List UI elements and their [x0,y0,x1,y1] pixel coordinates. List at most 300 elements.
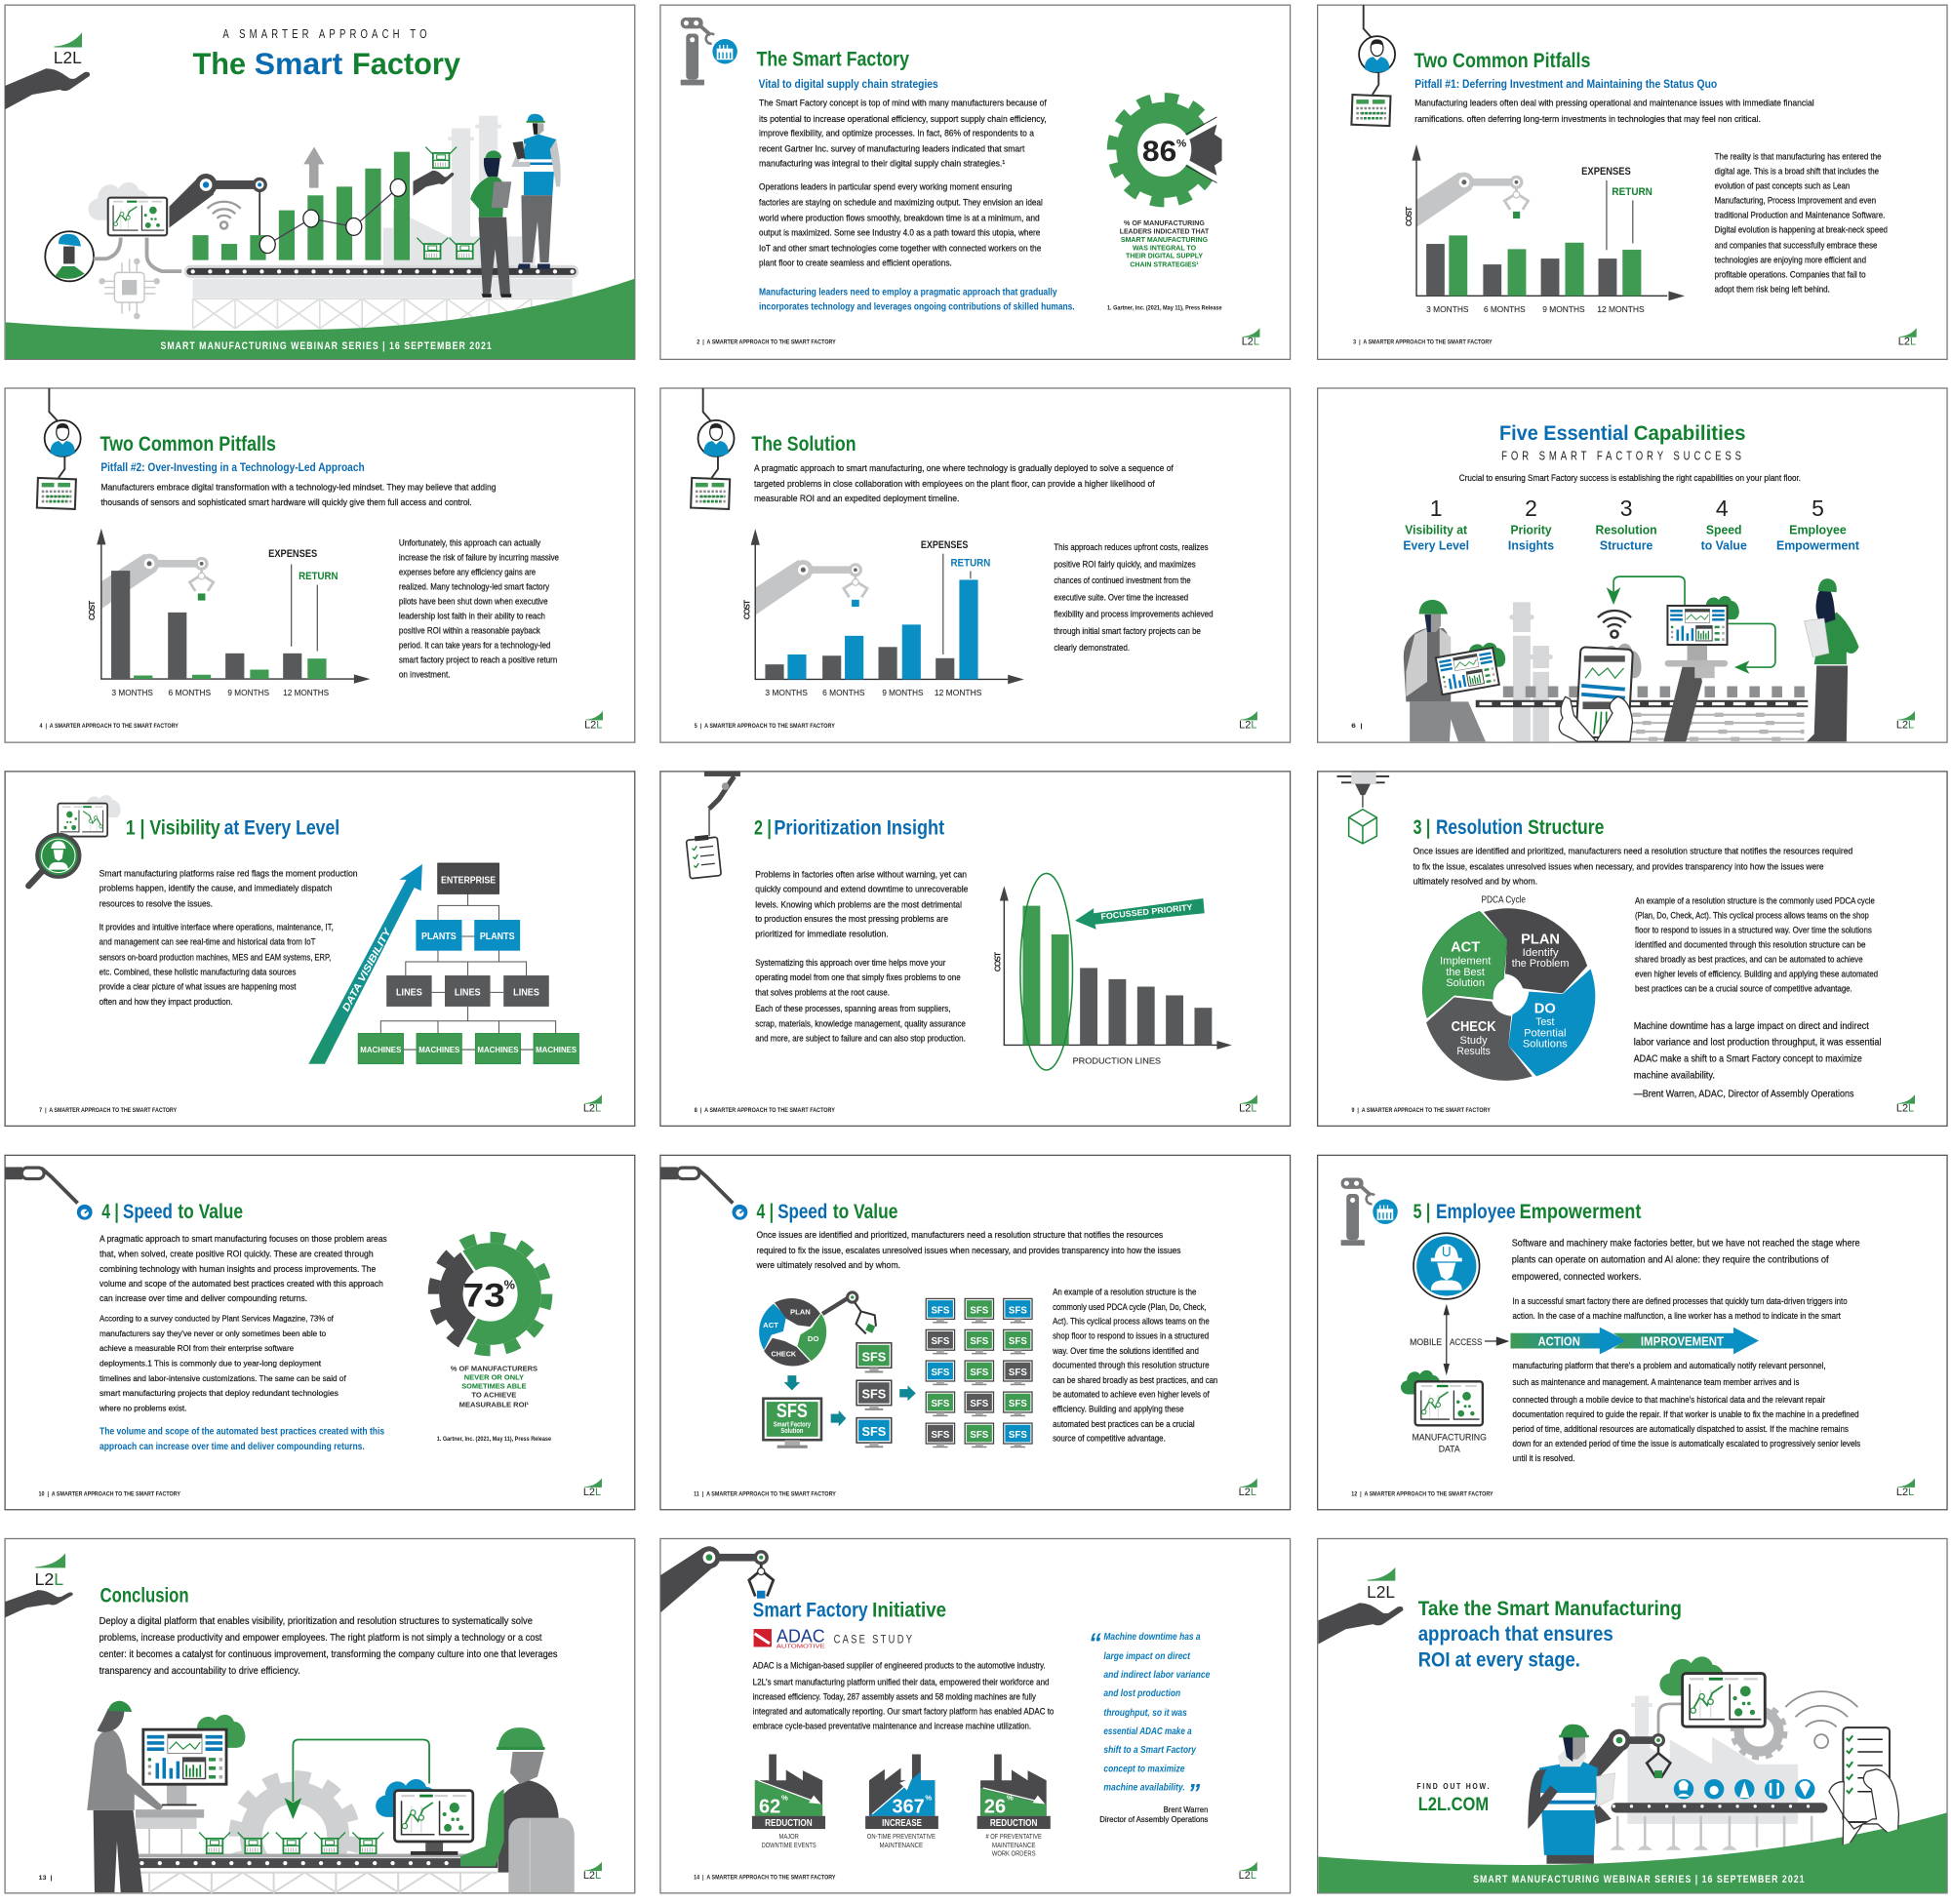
chart: cost vs return: 6 MONTHS [822,688,865,697]
body text: measurable ROI and an expedited deployment timeline. [754,493,959,503]
arrow: green side loop [1729,623,1775,674]
gear stat 86 percent: % [1176,139,1186,150]
logo: L2L [1367,1582,1395,1602]
arrow: right [831,1410,846,1426]
blue callout text [759,288,1075,313]
logo: L2L [1239,719,1256,731]
capability 3: Resolution [1596,522,1657,536]
trend line [259,178,406,254]
heading: to Value [833,1201,897,1223]
gear caption: SOMETIMES ABLE [461,1382,527,1391]
chart: cost vs return: 12 MONTHS [283,688,329,697]
panel: slide 11 speed to value [660,1155,1291,1510]
call to action: L2L.COM [1418,1794,1489,1815]
stat: 367 percent increase: 367 [893,1796,925,1817]
chart: pareto: COST [993,951,1003,972]
segment: do: DO [1534,1001,1556,1016]
side text: evolution of past concepts such as Lean [1715,179,1850,190]
arrow: action improvement: IMPROVEMENT [1641,1333,1724,1348]
body text: required to fix the issue, escalates unresolved issues when necessary, and provides transparency into how the issues [757,1245,1181,1255]
monitors: SFS grid: SFS [970,1305,989,1316]
PDCA wheel small: DO [808,1334,818,1343]
logo: L2L [1896,1103,1914,1115]
body text: quickly compound and extend downtime to unrecoverable [755,884,968,894]
icon: robot arm [1575,1729,1670,1787]
body text 2: where no problems exist. [99,1403,186,1412]
heading: ROI at every stage. [1418,1648,1580,1671]
icon: printer and cube [1337,772,1389,844]
PDCA wheel small: CHECK [772,1350,797,1359]
heading [1413,1201,1641,1223]
body text: etc. Combined, these holistic manufacturing data sources [100,967,297,977]
side text: be automated to achieve even higher levels of [1053,1389,1210,1400]
chart: cost vs return: RETURN [299,571,338,582]
conveyor belt [184,265,578,278]
body text middle: In a successful smart factory there are defined processes that quickly turn data-driven triggers into [1513,1295,1848,1306]
stat caption: MAJOR [778,1834,799,1841]
panel: slide 7 visibility [5,772,635,1126]
logo: L2L [1242,337,1259,348]
conveyor belt [1612,1803,1827,1812]
heading: approach that ensures [1418,1623,1613,1646]
footer: 3 | A SMARTER APPROACH TO THE SMART FACTORY [1353,339,1493,346]
arrow: green top loop [1607,576,1685,605]
side text: Digital evolution is happening at break-neck speed [1715,223,1888,234]
stat caption [762,1834,816,1849]
logo: L2L [1896,1487,1914,1498]
body text [753,1660,1054,1730]
body text bottom: connected through a mobile device to that machine's historical data and the relevant repair [1513,1394,1825,1405]
level: plants [416,920,520,951]
footer: 10 | A SMARTER APPROACH TO THE SMART FACTORY [39,1490,180,1497]
chart: cost vs return: COST [87,600,97,620]
chart: cost vs return [741,529,1024,697]
segment: act: Implement [1440,955,1491,967]
quote text: Machine downtime has a large impact on direct and indirect [1634,1021,1869,1032]
panel: slide 13 conclusion [5,1538,635,1895]
panel: slide 3 pitfall 1 [1318,5,1947,359]
side text: realized. Many technology-led smart factory [399,581,549,592]
body text top [1512,1239,1860,1283]
gear caption: MEASURABLE ROI¹ [459,1401,530,1409]
heading [1418,1598,1682,1671]
heading: Employee [1436,1201,1516,1223]
heading: Resolution [1436,816,1523,839]
body text 2: smart manufacturing projects that deploy redundant technologies [100,1388,338,1398]
side text: clearly demonstrated. [1054,642,1130,653]
logo: L2L [583,1870,601,1882]
capability 5: Employee [1789,522,1847,536]
heading: Smart Factory [753,1599,868,1621]
body text 2: timelines and labor-intensive customizations. The same can be said of [100,1373,346,1383]
side text: positive ROI within a reasonable payback [399,624,540,635]
level: machines: MACHINES [360,1045,402,1054]
monitor: SFS large: Solution [780,1428,803,1435]
PDCA wheel small [759,1298,826,1366]
logo: L2L [584,719,602,731]
panel: slide 8 prioritization [660,772,1291,1126]
icon: grey cloud [1596,644,1642,678]
icon: robot arm and clipboard [686,772,740,879]
stat: 26 percent reduction: REDUCTION [990,1818,1037,1829]
capability 5 [1776,496,1860,552]
body text 2: According to a survey conducted by Plant Services Magazine, 73% of [100,1314,334,1324]
quote text: machine availability. [1634,1071,1715,1082]
body text: IoT and other smart technologies come together with connected workers on the [759,242,1041,253]
heading: Speed [123,1201,173,1223]
body text bottom: documentation required to guide the repair. If that worker is unable to fix the machine in a predefined [1513,1408,1859,1419]
chart: cost vs return: 9 MONTHS [1542,304,1585,314]
chart: cost vs return: 12 MONTHS [935,688,982,697]
panel: slide 15 closing [1318,1538,1947,1893]
monitors: SFS grid: SFS [931,1430,950,1441]
capability 4: Speed [1706,522,1742,536]
body text: manufacturing was integral to their digital supply chain strategies.¹ [759,158,1005,169]
person: woman at workstation [87,1701,204,1892]
monitor: SFS large [763,1399,821,1448]
title: Smart [255,46,343,81]
footer: 13 | [39,1875,53,1882]
subheading: Pitfall #2: Over-Investing in a Technology-Led Approach [100,460,365,474]
icon: robot arm [660,1546,774,1612]
body text: center: it becomes a catalyst for continuous improvement, transforming the company culture into one that leverages [100,1649,557,1660]
footer: 7 | A SMARTER APPROACH TO THE SMART FACTORY [39,1107,178,1114]
body text: problems, increase productivity and empower employees. The right platform is not simply a technology or a cost [100,1633,542,1644]
segment: check: Results [1456,1046,1491,1057]
level: enterprise: ENTERPRISE [441,876,496,887]
chart: cost vs return: 6 MONTHS [169,688,212,697]
monitors: SFS grid: SFS [970,1336,989,1347]
heading: Speed [777,1201,827,1223]
body text bottom: down for an extended period of time the issue is automatically escalated to progressively senior levels [1513,1438,1860,1448]
illustration: factory chain [1630,715,1804,739]
capability 5: Empowerment [1776,537,1860,552]
person: woman with clipboard [1804,578,1859,741]
icon: dashboard monitor [143,1729,226,1805]
body text: Operations leaders in particular spend every working moment ensuring [759,181,1012,192]
stat caption: MAINTENANCE [880,1843,924,1849]
body text: its potential to increase operational efficiency, support supply chain efficiency, [759,113,1047,124]
heading: Prioritization Insight [774,816,944,839]
monitors: SFS medium [856,1343,892,1448]
mobile access label: MOBILE [1410,1337,1442,1347]
side text: Unfortunately, this approach can actually [399,536,540,547]
quote text [1634,1021,1882,1100]
side text: Act). This cyclical process allows teams on the [1053,1316,1210,1327]
side text: automated best practices can be a crucial [1053,1418,1195,1429]
logo: L2L [583,1103,601,1115]
capability 4: to Value [1701,537,1747,552]
heading: to Value [178,1201,243,1223]
person: man with tablet [1404,600,1505,741]
logo: ADAC: AUTOMOTIVE [776,1645,825,1650]
wave foreground [1779,1812,1947,1866]
icon: dashboard monitor [108,198,167,235]
side text: This approach reduces upfront costs, realizes [1054,541,1209,552]
body text 2: manufacturers say they've never or only sometimes been able to [100,1329,326,1338]
body text: operating model from one that simply fixes problems to one [755,972,961,982]
icon: employee circle [1413,1233,1480,1299]
monitors: SFS grid: SFS [931,1368,950,1378]
heading: Five Essential [1499,420,1629,445]
body text bottom: until it is resolved. [1513,1452,1575,1463]
body text 2: deployments.1 This is commonly due to year-long deployment [100,1359,322,1368]
heading: 1 | Visibility [126,817,220,840]
monitors: SFS grid [926,1298,1032,1448]
icon: arm and gauge [660,1167,747,1220]
call to action: FIND OUT HOW. [1416,1781,1489,1791]
stat caption: ON-TIME PREVENTATIVE [867,1834,936,1841]
arrow: data visibility: DATA VISIBILITY [340,926,394,1013]
monitors: SFS grid: SFS [970,1399,989,1409]
icon: wifi [1598,611,1631,638]
side text: flexibility and process improvements achieved [1054,609,1214,619]
body text: Smart manufacturing platforms raise red flags the moment production [100,868,358,879]
arrow: mobile access vertical [1444,1304,1450,1375]
subheading: FOR SMART FACTORY SUCCESS [1501,451,1741,463]
process icons [1674,1779,1814,1799]
body text: levels. Knowing which problems are the most detrimental [755,899,962,910]
monitors: SFS grid: SFS [1009,1430,1027,1441]
pull quote: and indirect labor variance [1103,1670,1211,1681]
body text [100,482,497,507]
illustration: conveyor [135,1854,498,1868]
gear caption: SMART MANUFACTURING [1121,235,1208,244]
icon: hanging worker and tablet [691,388,735,509]
pull quote: essential ADAC make a [1103,1726,1192,1737]
pull quote: and lost production [1103,1688,1180,1699]
side text: expenses before any efficiency gains are [399,566,536,576]
logo [583,1478,602,1498]
segment: do: Test [1535,1016,1554,1028]
panel: slide 14 case study [660,1538,1291,1893]
body text bottom: such as maintenance and management. A maintenance team member arrives and is [1513,1376,1800,1387]
heading: Initiative [872,1599,946,1621]
side text: chances of continued investment from the [1054,575,1191,585]
level: lines: LINES [513,987,539,998]
chart: cost vs return: EXPENSES [921,539,969,551]
logo [1896,1094,1915,1115]
side text [1715,150,1888,294]
chart: cost vs return: COST [741,599,751,619]
attribution [1099,1805,1208,1824]
icon: pillar robot [681,18,737,85]
icon: worker in circle [45,231,94,281]
chart: cost vs return: 12 MONTHS [1597,304,1645,314]
icon: dashboard monitor [1683,1674,1765,1726]
gear stat 73 percent [427,1231,552,1356]
monitors: SFS medium: SFS [862,1424,886,1439]
side text: and companies that successfully embrace these [1715,239,1877,250]
side text: smart factory project to reach a positive return [399,654,557,665]
logo [1896,711,1915,731]
stat: 62 percent reduction [752,1755,825,1829]
PDCA cycle [1422,908,1595,1081]
side text: increase the risk of failure by incurring massive [399,551,559,562]
body text top: plants can operate on automation and AI alone: they require the contributions of [1512,1255,1829,1266]
capability 5: 5 [1812,496,1824,521]
chart: pareto: PRODUCTION LINES [1072,1056,1161,1066]
heading: Capabilities [1634,420,1746,445]
body text: recent Gartner Inc. survey of manufacturing leaders indicated that smart [759,143,1025,154]
blue callout text: The volume and scope of the automated best practices created with this [100,1427,384,1438]
body text [756,1229,1181,1270]
manufacturing data label: DATA [1439,1443,1460,1453]
panel: slide 12 employee empowerment [1318,1155,1947,1510]
green boxes [417,147,480,258]
attribution: Director of Assembly Operations [1099,1815,1208,1824]
arrow: focussed priority [1075,898,1205,930]
source note: 1. Gartner, Inc. (2021, May 11), Press Release [437,1436,551,1443]
chart: cost vs return: RETURN [950,557,990,569]
logo: L2L [54,48,82,67]
chart: cost vs return: 3 MONTHS [112,688,153,697]
heading [757,1201,897,1223]
body text [754,462,1174,503]
footer: 4 | A SMARTER APPROACH TO THE SMART FACTORY [40,723,179,730]
icon: wifi [208,202,241,228]
segment: check: Study [1460,1035,1488,1047]
level: lines [386,975,549,1007]
chart: cost vs return: RETURN [1612,186,1652,198]
capability 1 [1403,496,1469,552]
capability 2 [1508,496,1554,552]
heading: at Every Level [224,817,339,840]
stat caption [985,1834,1042,1857]
heading [1413,816,1604,839]
side text: through initial smart factory projects can be [1054,625,1201,636]
body text bottom: period of time, additional resources are automatically dispatched to assist. If the machine remains [1513,1423,1849,1434]
stat caption [867,1834,936,1849]
side text [1054,541,1214,653]
logo [583,1094,602,1115]
heading: Empowerment [1520,1201,1641,1223]
panel: slide 2 the smart factory [660,5,1291,359]
side text: technologies are enjoying more efficient and [1715,254,1866,264]
segment: do: Solutions [1523,1038,1568,1050]
body text: Once issues are identified and prioritized, manufacturers need a resolution structure that notifies the resources required [1413,846,1852,856]
body text: The Smart Factory concept is top of mind with many manufacturers because of [759,98,1047,108]
footer: 2 | A SMARTER APPROACH TO THE SMART FACTORY [697,339,836,346]
body text: L2L's smart manufacturing platform unified their data, empowered their workforce and [753,1676,1050,1686]
body text [100,868,358,1007]
arrow: action improvement [1510,1328,1759,1354]
heading kicker: A SMARTER APPROACH TO [222,28,427,42]
capability 3: 3 [1620,496,1632,521]
side text: on investment. [399,668,450,679]
icon: phone in hand [1559,647,1633,741]
segment: plan [1484,908,1587,993]
body text 2: achieve a measurable ROI from their enterprise software [100,1343,294,1353]
capability 1: 1 [1430,496,1443,521]
heading: Take the Smart Manufacturing [1418,1598,1682,1620]
icon: hanging worker and tablet [37,388,81,509]
gear stat 86 percent: 86 [1142,136,1176,168]
heading: Structure [1528,816,1604,839]
arrow: data visibility [308,864,422,1064]
gear caption [451,1365,538,1409]
footer: 11 | A SMARTER APPROACH TO THE SMART FACTORY [694,1490,836,1497]
body text: provide a clear picture of what issues are happening most [100,981,297,992]
illustration: workstation [1663,596,1739,741]
chart: cost vs return: EXPENSES [268,548,318,560]
body text: can increase over time and deliver compounding returns. [100,1292,307,1303]
person: man with tablet [1528,1725,1615,1864]
logo [584,711,603,731]
monitors: SFS grid: SFS [1009,1305,1027,1316]
body text bottom [1513,1360,1860,1463]
gear caption: LEADERS INDICATED THAT [1120,226,1210,235]
logo [1896,1478,1915,1498]
icon: phone checklist in hand [1829,1727,1898,1854]
body text top: Software and machinery make factories better, but we have not reached the stage where [1512,1239,1860,1250]
quote text: labor variance and lost production throughput, it was essential [1634,1038,1882,1049]
green wave footer [6,279,635,359]
monitors: SFS grid: SFS [931,1305,950,1316]
gear caption: TO ACHIEVE [471,1390,516,1399]
icon: gear [1732,1705,1785,1758]
body text: plant floor to create seamless and efficient operations. [759,258,952,268]
arrow: down [784,1375,800,1390]
body text: A pragmatic approach to smart manufacturing focuses on those problem areas [100,1233,387,1244]
icon: hand [1318,1603,1403,1645]
arrow: right [899,1385,916,1401]
panel: slide 9 resolution structure [1318,772,1947,1126]
logo: L2L [1896,719,1914,731]
illustration: truss [137,1873,498,1892]
side text: Manufacturing, Process Improvement and even [1715,194,1876,205]
footer: 5 | A SMARTER APPROACH TO THE SMART FACTORY [695,723,835,730]
body text: Manufacturing leaders often deal with pressing operational and maintenance issues with immediate financial [1414,98,1814,108]
blue callout text: incorporates technology and leverages ongoing contributions of skilled humans. [759,302,1075,313]
level: plants: PLANTS [421,932,457,942]
footer: 6 | [1351,723,1363,730]
icon: wifi [1785,1691,1857,1748]
body text: world where production flows smoothly, breakdown time is at a minimum, and [758,213,1040,223]
logo [1898,328,1917,348]
logo [583,1862,602,1882]
segment: plan: Identify [1523,947,1559,959]
illustration: gear [228,1770,361,1853]
heading: 5 | [1413,1201,1430,1223]
segment: do: Potential [1524,1027,1566,1039]
level: enterprise [438,863,498,893]
side text: even higher levels of efficiency. Building and applying these automated [1635,969,1878,979]
capability 2: Insights [1508,537,1554,552]
heading: Conclusion [100,1584,189,1606]
chart: cost vs return: 3 MONTHS [1426,304,1469,314]
footer text: SMART MANUFACTURING WEBINAR SERIES | 16 SEPTEMBER 2021 [1473,1874,1805,1885]
body text: that, when solved, create positive ROI quickly. These are created through [100,1248,374,1258]
chart: cost vs return [1404,144,1685,314]
title: The [192,46,246,81]
manufacturing data label [1412,1432,1487,1453]
body text: output is maximized. Some see Industry 4.0 as a path toward this utopia, where [759,227,1040,238]
logo: ADAC: ADAC [776,1625,825,1646]
pull quote: “ [1089,1630,1101,1657]
body text [1413,846,1852,887]
body text: scrap, materials, knowledge management, quality assurance [755,1017,966,1028]
illustration: factory background [383,116,535,265]
illustration: conveyor truss [193,279,573,329]
gear caption: NEVER OR ONLY [464,1373,524,1382]
side text: An example of a resolution structure is the [1053,1287,1196,1297]
panel: slide 10 speed to value [5,1155,635,1510]
side text: (Plan, Do, Check, Act). This cyclical process allows teams on the shop [1635,910,1869,921]
capability 2: Priority [1510,522,1552,536]
monitors: SFS medium: SFS [862,1349,886,1364]
stat caption: DOWNTIME EVENTS [762,1843,816,1849]
